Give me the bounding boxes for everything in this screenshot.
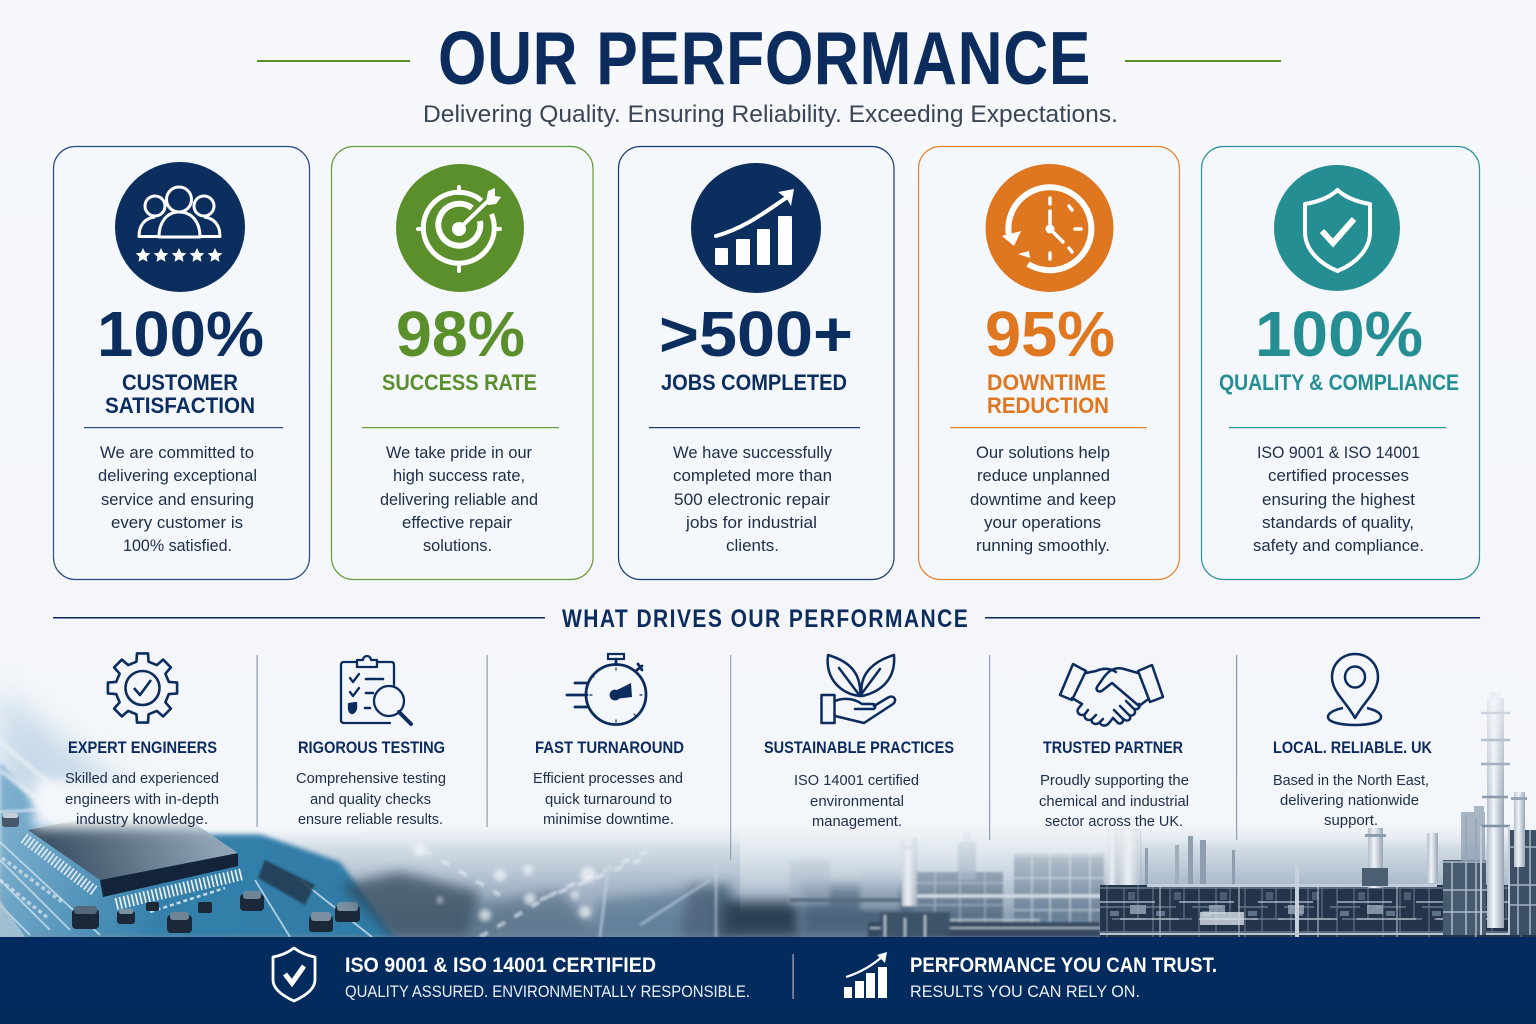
icon: gear with check (108, 653, 177, 723)
description: minimise downtime. (543, 811, 674, 828)
icon: shield with check (1274, 165, 1400, 291)
description: quick turnaround to (545, 791, 672, 808)
icon: rising bars (844, 952, 887, 998)
icon: stopwatch (567, 654, 646, 724)
panel: quality and compliance (1202, 146, 1480, 580)
description: Our solutions help (976, 444, 1110, 462)
description: We have successfully (673, 444, 833, 462)
background photo: electronics and refinery (0, 685, 1536, 937)
label: downtime reduction: REDUCTION (987, 393, 1109, 418)
description: ensure reliable results. (298, 811, 443, 828)
driver: rigorous testing (296, 656, 446, 828)
figure: 95%: 95% (985, 298, 1115, 370)
label: customer satisfaction (105, 370, 255, 418)
label: downtime reduction (987, 370, 1109, 418)
description: We take pride in our (386, 444, 532, 462)
description: completed more than (673, 467, 832, 485)
description: downtime and keep (970, 491, 1116, 509)
refinery (722, 692, 1536, 937)
title: LOCAL. RELIABLE. UK (1273, 739, 1432, 757)
description: 500 electronic repair (674, 491, 831, 509)
description (296, 770, 446, 828)
subtitle: Delivering Quality. Ensuring Reliability. Exceeding Expectations. (423, 101, 1118, 128)
description: support. (1324, 812, 1378, 829)
description: chemical and industrial (1039, 793, 1189, 810)
label: downtime reduction: DOWNTIME (987, 370, 1106, 395)
description (533, 770, 683, 828)
section heading: WHAT DRIVES OUR PERFORMANCE (562, 604, 968, 632)
description (65, 770, 219, 828)
description: industry knowledge. (76, 811, 208, 828)
description: We are committed to (100, 444, 254, 462)
description: sector across the UK. (1045, 813, 1183, 830)
footer banner (0, 937, 1536, 1024)
description: service and ensuring (101, 491, 254, 509)
description: clients. (726, 537, 779, 555)
performance text (910, 954, 1217, 1001)
title: FAST TURNAROUND (535, 739, 684, 757)
description: jobs for industrial (685, 514, 817, 532)
label: quality and compliance: QUALITY & COMPLIANCE (1219, 370, 1459, 395)
certification text (345, 954, 750, 1001)
icon: target and arrow (396, 164, 524, 292)
description: ensuring the highest (1262, 491, 1415, 509)
figure: >500+: >500+ (659, 298, 853, 370)
icon: certified shield (273, 948, 315, 1001)
label: customer satisfaction: SATISFACTION (105, 393, 255, 418)
icon: map pin (1328, 654, 1381, 725)
label: customer satisfaction: CUSTOMER (122, 370, 238, 395)
description (1039, 772, 1189, 830)
description (380, 444, 538, 555)
description (1273, 772, 1429, 829)
driver: fast turnaround (533, 654, 684, 828)
description: management. (812, 813, 902, 830)
fog (34, 685, 1536, 828)
description: Based in the North East, (1273, 772, 1429, 789)
description: Efficient processes and (533, 770, 683, 787)
description (794, 772, 919, 830)
description: delivering nationwide (1280, 792, 1419, 809)
description: standards of quality, (1262, 514, 1414, 532)
icon: leaves in hand (822, 655, 895, 723)
performance text: PERFORMANCE YOU CAN TRUST. (910, 954, 1217, 977)
description: every customer is (111, 514, 243, 532)
description (673, 444, 833, 555)
certification text: QUALITY ASSURED. ENVIRONMENTALLY RESPONSIBLE. (345, 983, 750, 1001)
driver: local reliable uk (1273, 654, 1432, 829)
description: ISO 9001 & ISO 14001 (1257, 444, 1420, 462)
description: delivering exceptional (98, 467, 257, 485)
label: jobs completed: JOBS COMPLETED (661, 370, 847, 395)
driver: trusted partner (1039, 664, 1189, 830)
description: delivering reliable and (380, 491, 538, 509)
description: solutions. (423, 537, 492, 555)
figure: 98%: 98% (396, 298, 525, 370)
figure: 100%: 100% (97, 298, 264, 370)
description: reduce unplanned (977, 467, 1110, 485)
icon: clock with return arrow (986, 164, 1114, 292)
panel: customer satisfaction (54, 146, 310, 580)
driver: sustainable practices (764, 655, 954, 830)
blurred middle zone (340, 830, 730, 937)
driver: expert engineers (65, 653, 219, 828)
description: environmental (810, 793, 904, 810)
icon: handshake (1060, 664, 1163, 726)
description: Comprehensive testing (296, 770, 446, 787)
panel: success rate (332, 146, 593, 580)
title: EXPERT ENGINEERS (68, 739, 217, 757)
description: Skilled and experienced (65, 770, 219, 787)
description: your operations (984, 514, 1101, 532)
icon: clipboard and magnifier (341, 656, 411, 724)
description (970, 444, 1116, 555)
title: RIGOROUS TESTING (298, 739, 445, 757)
icon: customers and stars (115, 162, 245, 292)
description: Proudly supporting the (1040, 772, 1189, 789)
title: OUR PERFORMANCE (438, 17, 1090, 100)
description (98, 444, 257, 555)
description (1253, 444, 1424, 555)
panel: downtime reduction (918, 146, 1180, 580)
panel: jobs completed (618, 146, 894, 580)
description: running smoothly. (976, 537, 1110, 555)
description: engineers with in-depth (65, 791, 219, 808)
description: ISO 14001 certified (794, 772, 919, 789)
description: 100% satisfied. (123, 537, 232, 555)
performance text: RESULTS YOU CAN RELY ON. (910, 983, 1140, 1001)
description: and quality checks (310, 791, 431, 808)
description: high success rate, (393, 467, 525, 485)
figure: 100%: 100% (1255, 298, 1423, 370)
description: certified processes (1268, 467, 1409, 485)
description: safety and compliance. (1253, 537, 1424, 555)
title: SUSTAINABLE PRACTICES (764, 739, 954, 757)
icon: growth chart (691, 163, 821, 293)
label: success rate: SUCCESS RATE (382, 370, 537, 395)
circuit board (0, 690, 396, 937)
title: TRUSTED PARTNER (1043, 739, 1183, 757)
certification text: ISO 9001 & ISO 14001 CERTIFIED (345, 954, 656, 977)
description: effective repair (402, 514, 513, 532)
